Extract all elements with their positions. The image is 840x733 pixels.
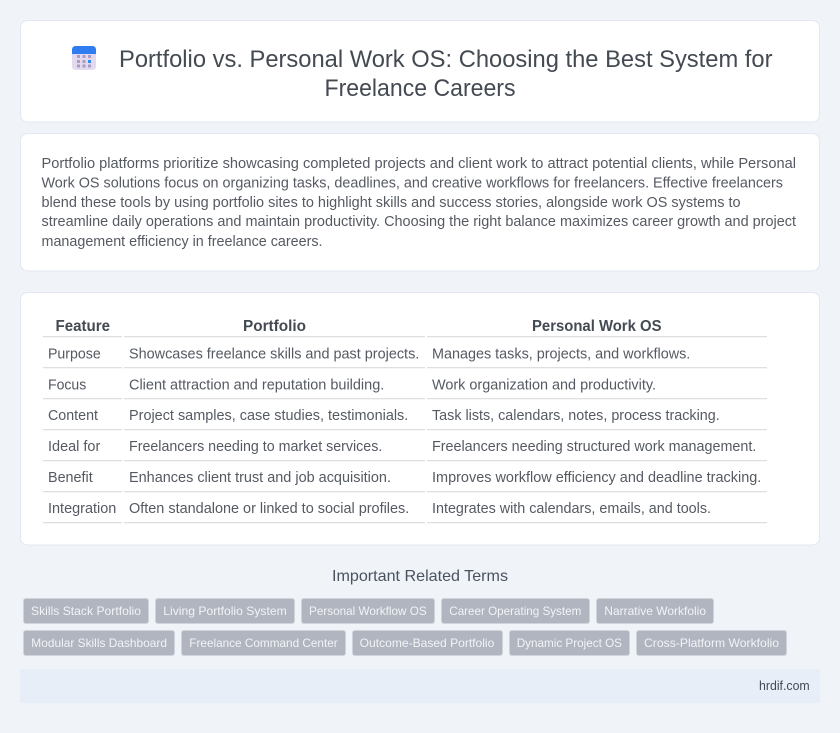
row: Focus: [43, 377, 767, 399]
row: Ideal for: Ideal for: [48, 439, 101, 455]
intro text: management efficiency in freelance careers.: [42, 234, 322, 250]
title: [119, 46, 772, 102]
tag: Personal Workflow OS: [302, 598, 434, 624]
title: Portfolio vs. Personal Work OS: Choosing the Best System for: [119, 46, 772, 73]
tag: Freelance Command Center: [182, 630, 346, 656]
intro text: streamline daily operations and maintain productivity. Choosing the right balance maximizes career growth and project: [42, 214, 796, 230]
row: Content: Task lists, calendars, notes, process tracking.: [432, 408, 720, 424]
intro text: [42, 156, 796, 250]
tag: Dynamic Project OS: [510, 630, 630, 656]
tag: Outcome-Based Portfolio: [352, 630, 502, 656]
tag: Career Operating System: Career Operating System: [449, 604, 581, 618]
tag: Personal Workflow OS: Personal Workflow OS: [309, 604, 427, 618]
intro text: blend these tools by using portfolio sites to highlight skills and success stories, alongside work OS systems to: [42, 195, 740, 211]
table header row: Personal Work OS: [532, 318, 662, 335]
tag list: [24, 598, 786, 656]
title: Freelance Careers: [324, 75, 516, 102]
row: Ideal for: [43, 439, 767, 461]
row: Integration: Integration: [48, 501, 116, 517]
row: Focus: Work organization and productivity.: [432, 377, 656, 393]
row: Benefit: Improves workflow efficiency and deadline tracking.: [432, 470, 761, 486]
tag: Living Portfolio System: [156, 598, 294, 624]
row: Ideal for: Freelancers needing to market services.: [129, 439, 382, 455]
tag: Freelance Command Center: Freelance Command Center: [189, 636, 338, 650]
tag: Skills Stack Portfolio: [24, 598, 148, 624]
panel: comparison table: [20, 292, 820, 545]
footer bar: hrdif.com: [759, 678, 810, 693]
row: Purpose: [43, 346, 767, 368]
row: Purpose: Purpose: [48, 346, 101, 362]
row: Content: [43, 408, 767, 430]
table header row: Feature: [56, 318, 110, 335]
table header row: Portfolio: [243, 318, 306, 335]
row: Ideal for: Freelancers needing structured work management.: [432, 439, 756, 455]
tag: Modular Skills Dashboard: Modular Skills Dashboard: [31, 636, 167, 650]
tag: Cross-Platform Workfolio: [636, 630, 786, 656]
tag: Narrative Workfolio: Narrative Workfolio: [604, 604, 706, 618]
row: Content: Content: [48, 408, 98, 424]
tag: Living Portfolio System: Living Portfolio System: [163, 604, 287, 618]
panel: intro paragraph: [20, 134, 820, 271]
row: Purpose: Manages tasks, projects, and workflows.: [432, 346, 690, 362]
footer bar: [20, 669, 820, 703]
row: Purpose: Showcases freelance skills and past projects.: [129, 346, 419, 362]
tag: Outcome-Based Portfolio: Outcome-Based Portfolio: [360, 636, 495, 650]
row: Benefit: [43, 470, 767, 492]
row: Content: Project samples, case studies, testimonials.: [129, 408, 408, 424]
tag: Skills Stack Portfolio: Skills Stack Portfolio: [31, 604, 141, 618]
tag: Narrative Workfolio: [596, 598, 714, 624]
row: Integration: [43, 501, 767, 523]
row: Integration: Often standalone or linked to social profiles.: [129, 501, 409, 517]
row: Integration: Integrates with calendars, emails, and tools.: [432, 501, 711, 517]
panel: header: [20, 20, 820, 122]
table header row: [43, 318, 767, 337]
intro text: Portfolio platforms prioritize showcasing completed projects and client work to attract potential clients, while Personal: [42, 156, 796, 172]
row: Benefit: Benefit: [48, 470, 93, 486]
intro text: Work OS solutions focus on organizing tasks, deadlines, and creative workflows for freelancers. Effective freelancers: [42, 175, 783, 191]
row: Benefit: Enhances client trust and job acquisition.: [129, 470, 391, 486]
row: Focus: Focus: [48, 377, 86, 393]
tag: Career Operating System: [442, 598, 590, 624]
tag: Modular Skills Dashboard: [24, 630, 174, 656]
tag: Cross-Platform Workfolio: Cross-Platform Workfolio: [644, 636, 779, 650]
tag: Dynamic Project OS: Dynamic Project OS: [517, 636, 622, 650]
icon: calendar: [72, 46, 96, 70]
heading: important related terms: Important Related Terms: [332, 568, 508, 585]
row: Focus: Client attraction and reputation building.: [129, 377, 384, 393]
